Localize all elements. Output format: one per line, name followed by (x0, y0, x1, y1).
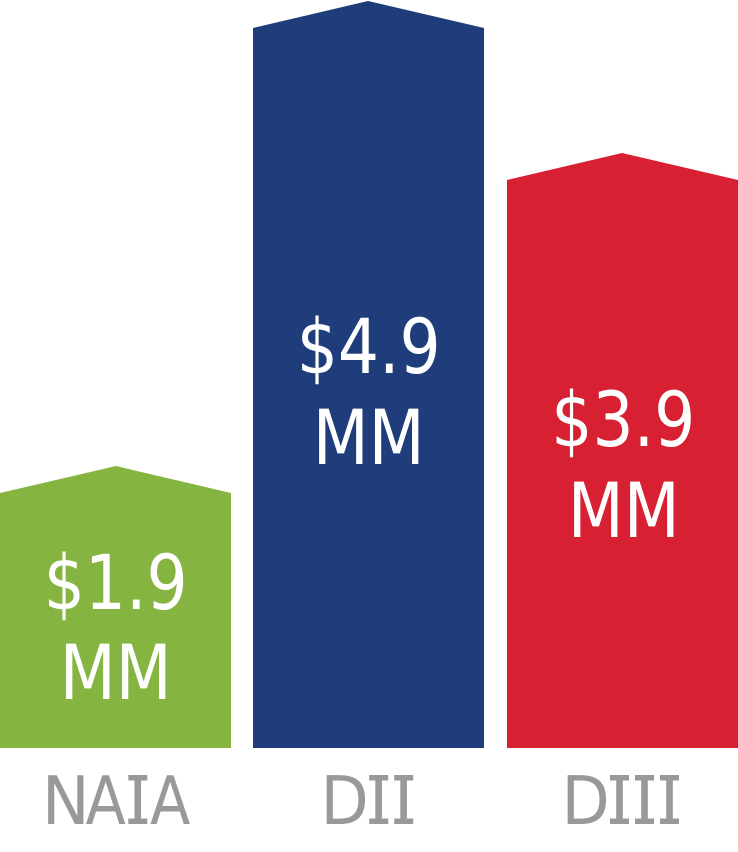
label: DII: D (320, 763, 369, 841)
label: DIII: D (562, 763, 610, 841)
label: NAIA: A (150, 761, 190, 840)
bar: DIII (507, 153, 738, 748)
bar: DII: $4.9 (297, 302, 441, 391)
label: NAIA: A (86, 761, 126, 840)
label: DIII (562, 762, 679, 841)
bar: NAIA (0, 466, 231, 748)
label: NAIA: I (128, 762, 148, 840)
bar: DII (253, 1, 484, 748)
label: DIII: I (635, 762, 654, 840)
label: DIII: I (610, 762, 629, 840)
label: DIII: I (660, 762, 679, 840)
label: NAIA (42, 761, 190, 840)
bar: DII: MM (313, 393, 425, 482)
bar: DIII: $3.9 (551, 375, 695, 464)
bar: NAIA: $1.9 (44, 538, 188, 627)
label: NAIA: N (42, 763, 90, 840)
label: DII: I (369, 762, 389, 840)
bar: DIII: MM (568, 466, 680, 555)
bar: NAIA: MM (60, 628, 172, 717)
label: DII: I (394, 762, 414, 840)
label: DII (320, 762, 414, 841)
